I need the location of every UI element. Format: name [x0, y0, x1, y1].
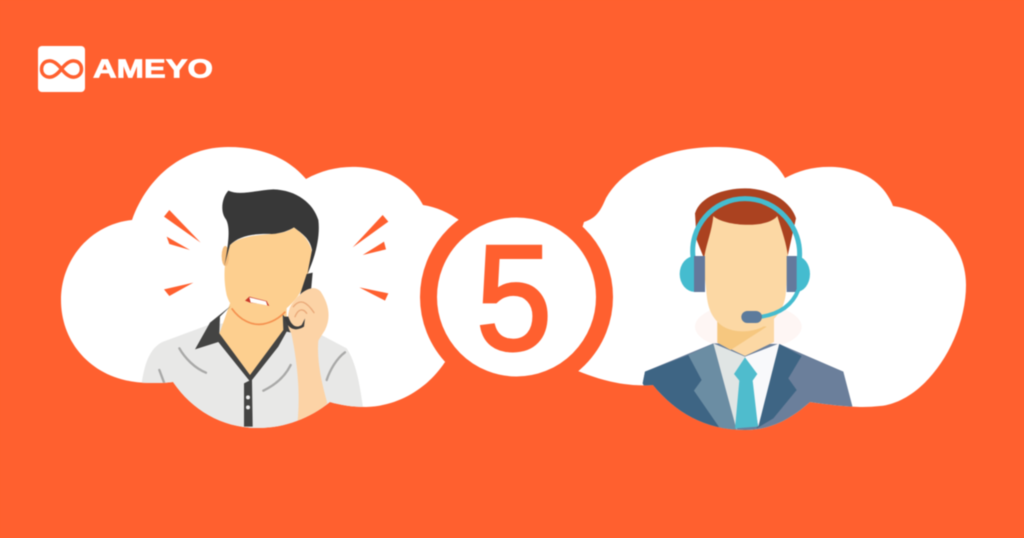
ring	[428, 209, 604, 385]
microphone	[741, 311, 762, 323]
number badge	[428, 209, 604, 385]
hair	[695, 188, 796, 263]
neck shadow halo	[696, 310, 801, 344]
face	[703, 216, 788, 331]
phone	[300, 273, 313, 295]
right ear cup	[796, 256, 810, 292]
collar and placket	[195, 306, 295, 427]
left ear cup	[680, 256, 695, 292]
logo icon: infinity	[38, 46, 85, 92]
left ear pad	[694, 256, 705, 292]
hand and forearm	[288, 288, 329, 421]
infographic canvas	[37, 45, 967, 431]
suit jacket	[643, 343, 853, 437]
customer figure	[142, 189, 363, 437]
jaw line	[232, 308, 285, 324]
left cloud: frustrated customer	[61, 147, 470, 437]
headband	[693, 199, 800, 259]
headset	[680, 199, 810, 323]
fingers	[293, 302, 314, 317]
hair	[222, 189, 319, 274]
cloud shape	[61, 147, 470, 428]
neck	[218, 303, 287, 380]
cloud shape	[560, 147, 966, 430]
face	[224, 227, 312, 308]
neck	[731, 318, 774, 356]
microphone boom	[762, 290, 798, 317]
ear	[222, 246, 229, 266]
shirt	[713, 343, 745, 430]
shirt creases	[159, 348, 345, 391]
right ear pad	[787, 256, 797, 292]
logo: Ameyo	[38, 46, 213, 92]
logo wordmark: AMEYO	[93, 54, 213, 84]
buttons	[246, 395, 250, 409]
number 5: 5	[476, 214, 552, 382]
shirt	[142, 324, 363, 428]
right cloud: call centre agent	[560, 147, 966, 437]
tie	[734, 357, 758, 428]
mouth	[245, 297, 269, 306]
agent figure	[643, 188, 853, 437]
anger marks	[164, 210, 388, 301]
